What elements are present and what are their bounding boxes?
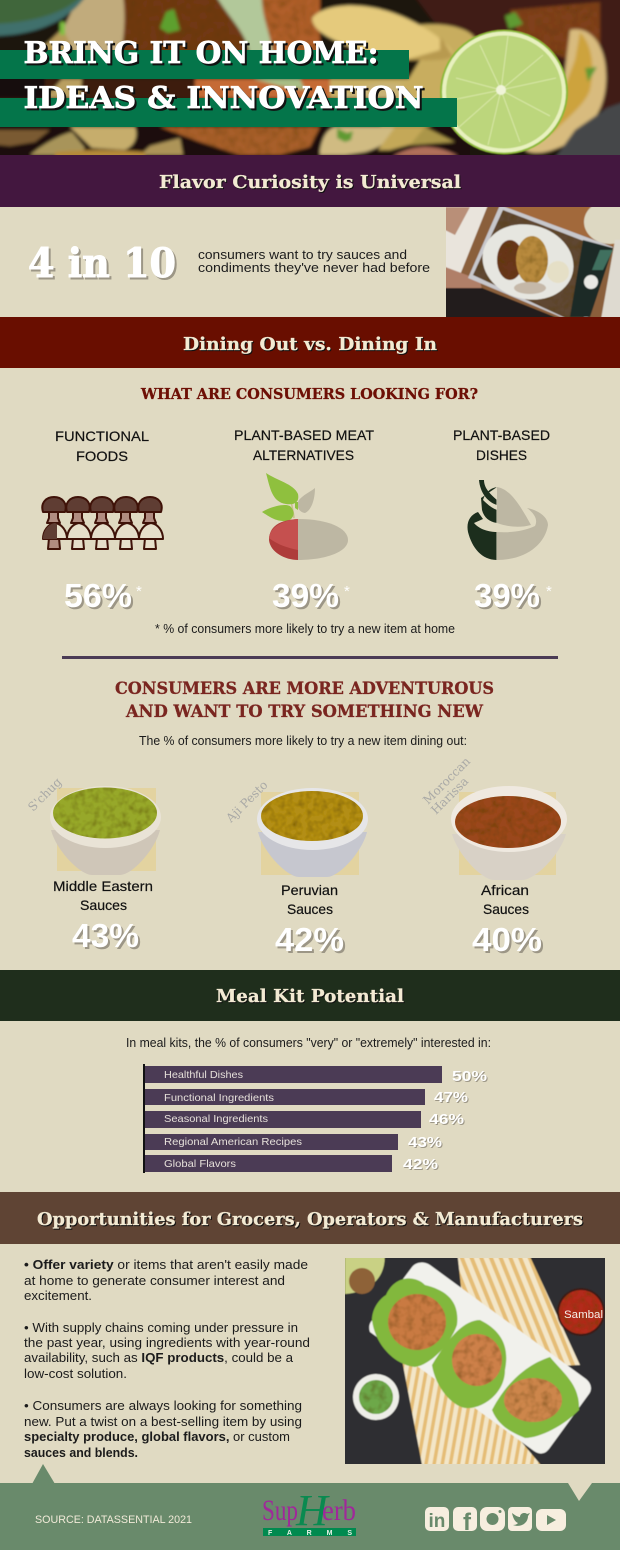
- bullet 2: [24, 1320, 310, 1381]
- label: [55, 428, 149, 464]
- heading: what are consumers looking for: WHAT ARE CONSUMERS LOOKING FOR?: [140, 385, 478, 403]
- value 39%: 39%: [474, 577, 540, 614]
- bar: seasonal ingredients: [145, 1111, 464, 1128]
- tag: s'chug: S'chug: [25, 775, 65, 814]
- label: PLANT-BASED MEAT: [234, 427, 374, 443]
- label: [453, 427, 550, 463]
- sauce: middle eastern: [25, 775, 161, 954]
- title banner: [0, 36, 457, 127]
- logo: supherb farms: H: [295, 1486, 330, 1535]
- bullet 1: excitement.: [24, 1288, 92, 1303]
- label: [234, 427, 374, 463]
- column: plant-based meat alternatives: [234, 427, 374, 614]
- icon: twitter: [508, 1507, 532, 1531]
- bar: healthful dishes: [145, 1066, 487, 1085]
- source: SOURCE: DATASSENTIAL 2021: [35, 1514, 192, 1526]
- tag: moroccan harissa: Harissa: [428, 774, 471, 817]
- label: Sauces: [287, 901, 333, 917]
- value 39%: 39%: [272, 577, 339, 614]
- callout triangle down: [568, 1483, 592, 1501]
- icon: facebook: [453, 1507, 477, 1536]
- bullet 3: new. Put a twist on a best-selling item by using: [24, 1414, 302, 1429]
- bar: functional ingredients: [145, 1089, 468, 1106]
- asterisk: *: [344, 583, 350, 600]
- asterisk: *: [136, 583, 142, 600]
- green banner strip 1: [0, 50, 409, 79]
- tan square: [57, 788, 156, 871]
- callout triangle up: [32, 1464, 55, 1484]
- icon: instagram: [480, 1507, 505, 1531]
- bar: healthful dishes: Healthful Dishes: [164, 1069, 243, 1081]
- tag: aji pesto: Aji Pesto: [223, 778, 271, 826]
- label: Sauces: [80, 897, 127, 913]
- bar: global flavors: [145, 1155, 438, 1173]
- column: plant-based dishes: [453, 427, 552, 614]
- bar: functional ingredients: 47%: [434, 1089, 468, 1106]
- logo: supherb farms: erb: [322, 1494, 356, 1527]
- asterisk: *: [546, 583, 552, 600]
- bar: regional american recipes: Regional American Recipes: [164, 1136, 302, 1148]
- value 56%: 56%: [64, 577, 132, 614]
- footer: [0, 1464, 620, 1550]
- heading: more adventurous: AND WANT TO TRY SOMETHING NEW: [125, 702, 484, 722]
- bar: regional american recipes: 43%: [408, 1134, 442, 1151]
- bullet 3: • Consumers are always looking for something: [24, 1398, 302, 1413]
- column: functional foods: [42, 428, 163, 614]
- logo: supherb farms: [262, 1486, 356, 1537]
- bullet 1: • Offer variety or items that aren't easily made: [24, 1257, 308, 1272]
- label: [281, 882, 338, 917]
- label: PLANT-BASED: [453, 427, 550, 443]
- footnote: * % of consumers more likely to try a new item at home: [155, 621, 455, 636]
- sauce: peruvian: [223, 778, 368, 958]
- section band: dining out vs dining in: Dining Out vs. Dining In: [183, 334, 437, 355]
- tan square: [261, 792, 359, 875]
- opportunities text: [24, 1257, 310, 1460]
- tan square: [459, 792, 556, 875]
- label: African: [481, 882, 529, 898]
- social icons: [425, 1507, 566, 1536]
- green banner strip 2: [0, 98, 457, 127]
- label: Sauces: [483, 901, 529, 917]
- meal kit intro: In meal kits, the % of consumers "very" or "extremely" interested in:: [126, 1035, 491, 1050]
- section band: opportunities: [0, 1192, 620, 1244]
- bullet 3: specialty produce, global flavors, or custom: [24, 1429, 290, 1444]
- label: Middle Eastern: [53, 878, 153, 894]
- section band: meal kit potential: [0, 970, 620, 1021]
- bullet 2: the past year, using ingredients with year-round: [24, 1335, 310, 1350]
- icon: mortar and herb bowl: [467, 480, 548, 560]
- icon: plant and patty: [262, 473, 348, 560]
- title line 1: BRING IT ON HOME:: [24, 36, 378, 71]
- bullet 3: [24, 1398, 302, 1460]
- bullet 1: at home to generate consumer interest and: [24, 1273, 285, 1288]
- stat description: [198, 247, 430, 275]
- value 42%: 42%: [275, 921, 344, 958]
- logo: supherb farms: F A R M S: [268, 1530, 352, 1537]
- bar: regional american recipes: [145, 1134, 442, 1151]
- heading: more adventurous: CONSUMERS ARE MORE ADVENTUROUS: [115, 679, 494, 699]
- bullet 3: sauces and blends.: [24, 1445, 138, 1460]
- sauce: african: [420, 754, 567, 958]
- icon: mushrooms: [42, 497, 163, 549]
- label: ALTERNATIVES: [253, 447, 354, 463]
- bar: functional ingredients: Functional Ingredients: [164, 1092, 274, 1104]
- icon: facebook: f: [463, 1509, 472, 1536]
- label: [481, 882, 529, 917]
- bullet 2: • With supply chains coming under pressure in: [24, 1320, 298, 1335]
- value 43%: 43%: [72, 917, 139, 954]
- bar: healthful dishes: 50%: [452, 1068, 487, 1085]
- stat: 4 in 10: 4 in 10: [28, 240, 176, 287]
- bullet 1: [24, 1257, 308, 1303]
- section band: dining out vs dining in: [0, 317, 620, 368]
- title line 2: IDEAS & INNOVATION: [24, 81, 423, 116]
- section band: flavor curiosity: [0, 155, 620, 207]
- icon: linkedin: in: [428, 1511, 445, 1532]
- value 40%: 40%: [472, 921, 542, 958]
- bar: global flavors: Global Flavors: [164, 1158, 236, 1170]
- section band: flavor curiosity: Flavor Curiosity is Universal: [159, 172, 461, 193]
- label: FOODS: [76, 448, 128, 464]
- hero photo: roast chicken, potatoes and lime: [0, 0, 620, 165]
- label: FUNCTIONAL: [55, 428, 149, 444]
- photo: cauliflower lettuce cups: [345, 1258, 605, 1464]
- bullet 2: low-cost solution.: [24, 1366, 127, 1381]
- section band: meal kit potential: Meal Kit Potential: [216, 986, 404, 1007]
- label: DISHES: [476, 447, 527, 463]
- bar: seasonal ingredients: Seasonal Ingredients: [164, 1113, 268, 1125]
- tag: moroccan harissa: Moroccan: [420, 754, 473, 807]
- bar: seasonal ingredients: 46%: [429, 1111, 464, 1128]
- bowl: [50, 786, 161, 875]
- bar: global flavors: 42%: [403, 1156, 438, 1173]
- photo: phone photographing a plate: [446, 207, 620, 317]
- bar chart: meal kit interest: [143, 1064, 487, 1173]
- logo: supherb farms: Sup: [262, 1494, 298, 1527]
- stat description: condiments they've never had before: [198, 260, 430, 275]
- icon: youtube: [536, 1509, 566, 1531]
- icon: linkedin: [425, 1507, 449, 1532]
- heading: more adventurous: [115, 679, 494, 722]
- stat description: consumers want to try sauces and: [198, 247, 407, 262]
- label: Peruvian: [281, 882, 338, 898]
- bowl: [257, 788, 368, 877]
- bowl: [451, 786, 567, 880]
- subheading: dining out: The % of consumers more likely to try a new item dining out:: [139, 733, 467, 748]
- bullet 2: availability, such as IQF products, could be a: [24, 1350, 294, 1365]
- tag: sambal: Sambal: [564, 1309, 603, 1321]
- section band: opportunities: Opportunities for Grocers, Operators & Manufacturers: [37, 1209, 583, 1230]
- label: [53, 878, 153, 913]
